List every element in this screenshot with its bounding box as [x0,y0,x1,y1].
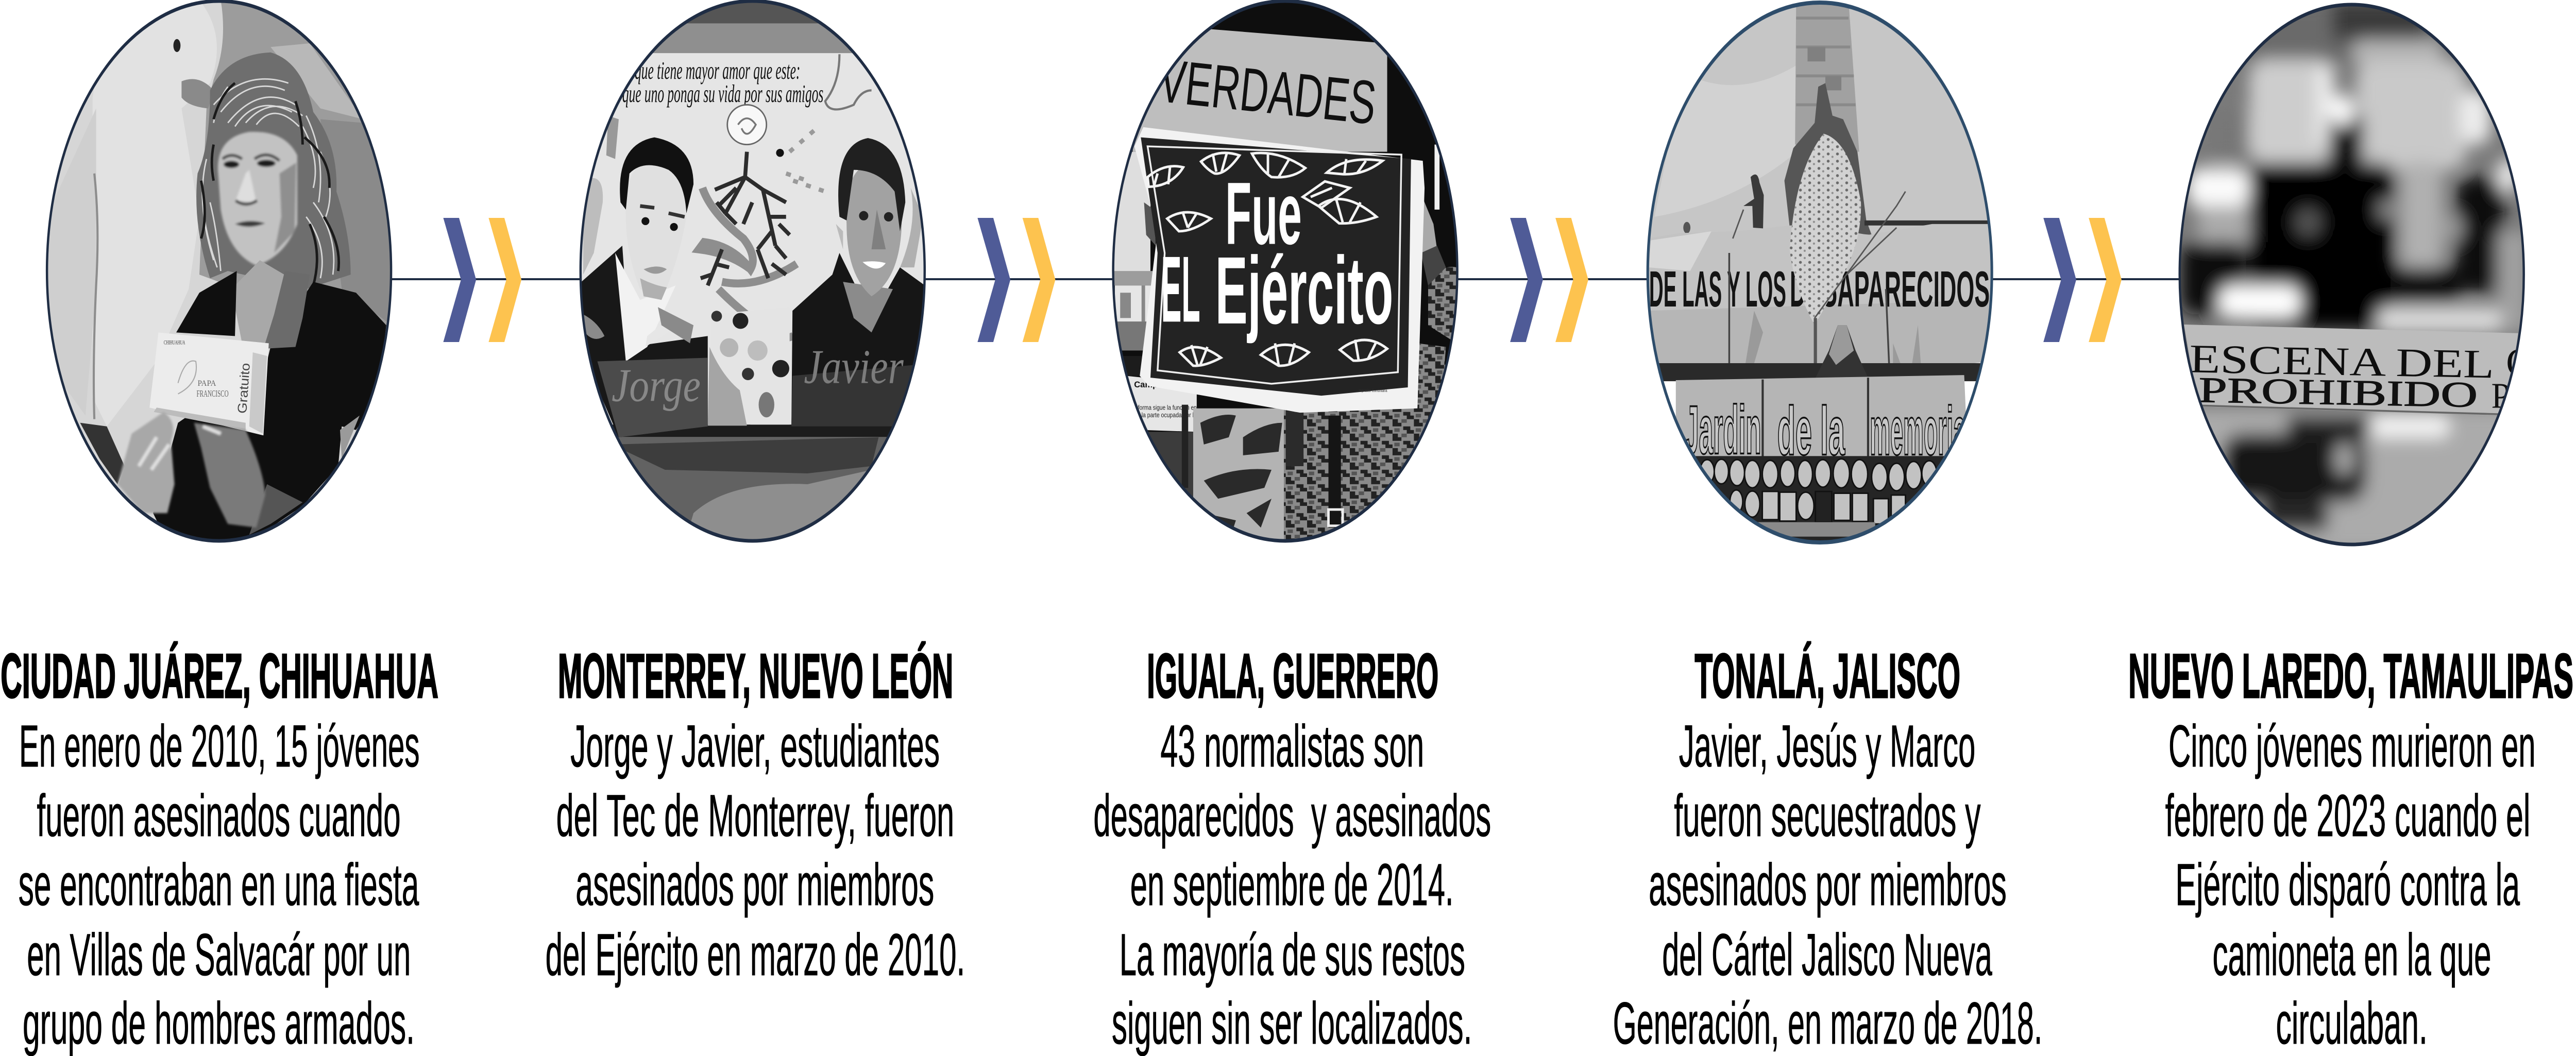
ticket: PAPA [198,379,216,388]
description: siguen sin ser localizados. [1112,991,1472,1056]
wooden boards [1676,375,1968,470]
mural inscription [622,62,823,107]
portrait: Javier: Javier [804,340,904,394]
portrait: Javier [791,138,925,427]
timeline connector line [391,278,2180,280]
photo circle: Monterrey [572,0,932,549]
spray text on the board: VERDADES [1156,46,1379,138]
chevrons 3 [1510,218,1588,342]
description: circulaban. [2276,991,2428,1056]
protest poster: Fue [1225,164,1302,263]
camouflage clothes [1193,267,1456,549]
photo circle: Iguala [1104,0,1467,551]
photo circle: Nuevo Laredo [2174,0,2532,553]
circle border [1648,3,1992,542]
portrait: Jorge [580,138,708,437]
ticket: Gratuito [235,363,253,414]
ticket [149,332,269,435]
circle border [2180,5,2524,544]
face [218,132,297,266]
protest poster: EL [1161,237,1200,342]
photo circle: Ciudad Juárez [36,0,406,549]
blurred background [2174,0,2532,553]
photo: mural of Jorge and Javier [572,0,932,549]
photo: protest banner "Fue el Ejército" [1104,0,1467,551]
hair [196,53,351,289]
description: asesinados por miembros [575,852,934,918]
description: Jorge y Javier, estudiantes [570,713,940,779]
description: En enero de 2010, 15 jóvenes [19,713,420,779]
memorial plaques [1647,456,1993,550]
chevrons 2 [977,218,1055,342]
text block: Ciudad Juárez [1,640,438,1056]
description: La mayoría de sus restos [1120,922,1465,988]
description: camioneta en la que [2212,922,2492,988]
protest poster: Impresión Comunitaria [1359,388,1387,393]
photo: monument and Jardín de la Memoria banner [1640,0,2000,550]
description: en septiembre de 2014. [1130,852,1454,918]
white information sign: forma sigue la función en [1138,404,1197,412]
heading: TONALÁ, JALISCO [1694,640,1960,711]
eyes drawn on the poster [1147,152,1387,366]
body [236,260,284,343]
mural inscription: que uno ponga su vida por sus amigos [622,80,823,108]
text block: Monterrey [546,640,965,988]
text block: Tonalá [1613,640,2042,1056]
photo circle: Tonalá [1640,0,2000,550]
hands [117,412,265,527]
description: Generación, en marzo de 2018. [1613,991,2042,1056]
description: fueron asesinados cuando [37,783,401,849]
raised hand [1410,174,1437,257]
portrait: Jorge: Jorge [612,359,701,412]
description: en Villas de Salvacár por un [27,922,411,988]
description: del Cártel Jalisco Nueva [1662,922,1992,988]
photo: monument and Jardín de la Memoria banner: DE LAS Y LOS [1649,261,1786,317]
description [2165,713,2536,1056]
people on the monument [1743,175,1764,228]
text block: Iguala [1093,640,1491,1056]
description: del Ejército en marzo de 2010. [546,922,965,988]
description [1613,713,2042,1056]
circle border [47,1,391,541]
description: 43 normalistas son [1160,713,1424,779]
ticket: CHIHUAHUA [164,339,185,346]
chevrons 1 [443,218,521,342]
description: del Tec de Monterrey, fueron [556,783,954,849]
description: desaparecidos y asesinados [1093,783,1491,849]
description [1093,713,1491,1056]
circle border [581,1,925,541]
text: memoria [1870,393,1966,470]
text block: Nuevo Laredo [2128,640,2573,1056]
seated person [1815,325,1868,380]
description: fueron secuestrados y [1674,783,1981,849]
statue [1785,83,1872,235]
police tape: PROHIBIDO [2198,370,2478,415]
description [19,713,420,1056]
description: asesinados por miembros [1649,852,2007,918]
circle border [1113,1,1458,541]
photo: woman holding a ticket [36,0,406,549]
police tape: C [2506,340,2532,385]
stone tower [1795,0,1859,152]
white information sign: Camp [1134,380,1158,389]
tree in front of the monument [1733,134,1905,380]
ticket: FRANCISCO [196,388,229,399]
description: grupo de hombres armados. [23,991,415,1056]
heading: MONTERREY, NUEVO LEÓN [558,640,953,711]
wooden boards: de la [1777,393,1845,470]
heading: CIUDAD JUÁREZ, CHIHUAHUA [1,640,438,711]
mural inscription: que tiene mayor amor que este: [635,57,800,84]
police tape: P [2492,376,2511,416]
central flower and tree [699,105,825,425]
white information sign: la parte ocupada por la [1142,412,1197,419]
protest poster: Ejército [1215,237,1393,344]
description [546,713,965,988]
chevrons 4 [2043,218,2122,342]
police tape [2184,325,2532,416]
police tape: ESCENA DEL [2189,336,2495,387]
white information sign [1126,376,1197,432]
photo: blurred crime-scene tape [2174,0,2532,553]
description: Javier, Jesús y Marco [1679,713,1975,779]
protest poster [1134,127,1425,413]
description: se encontraban en una fiesta [19,852,419,918]
wooden boards: Jardin [1685,391,1761,469]
large banner [1647,224,1993,369]
text: DESAPARECIDOS [1790,261,1990,317]
heading: IGUALA, GUERRERO [1147,640,1438,711]
